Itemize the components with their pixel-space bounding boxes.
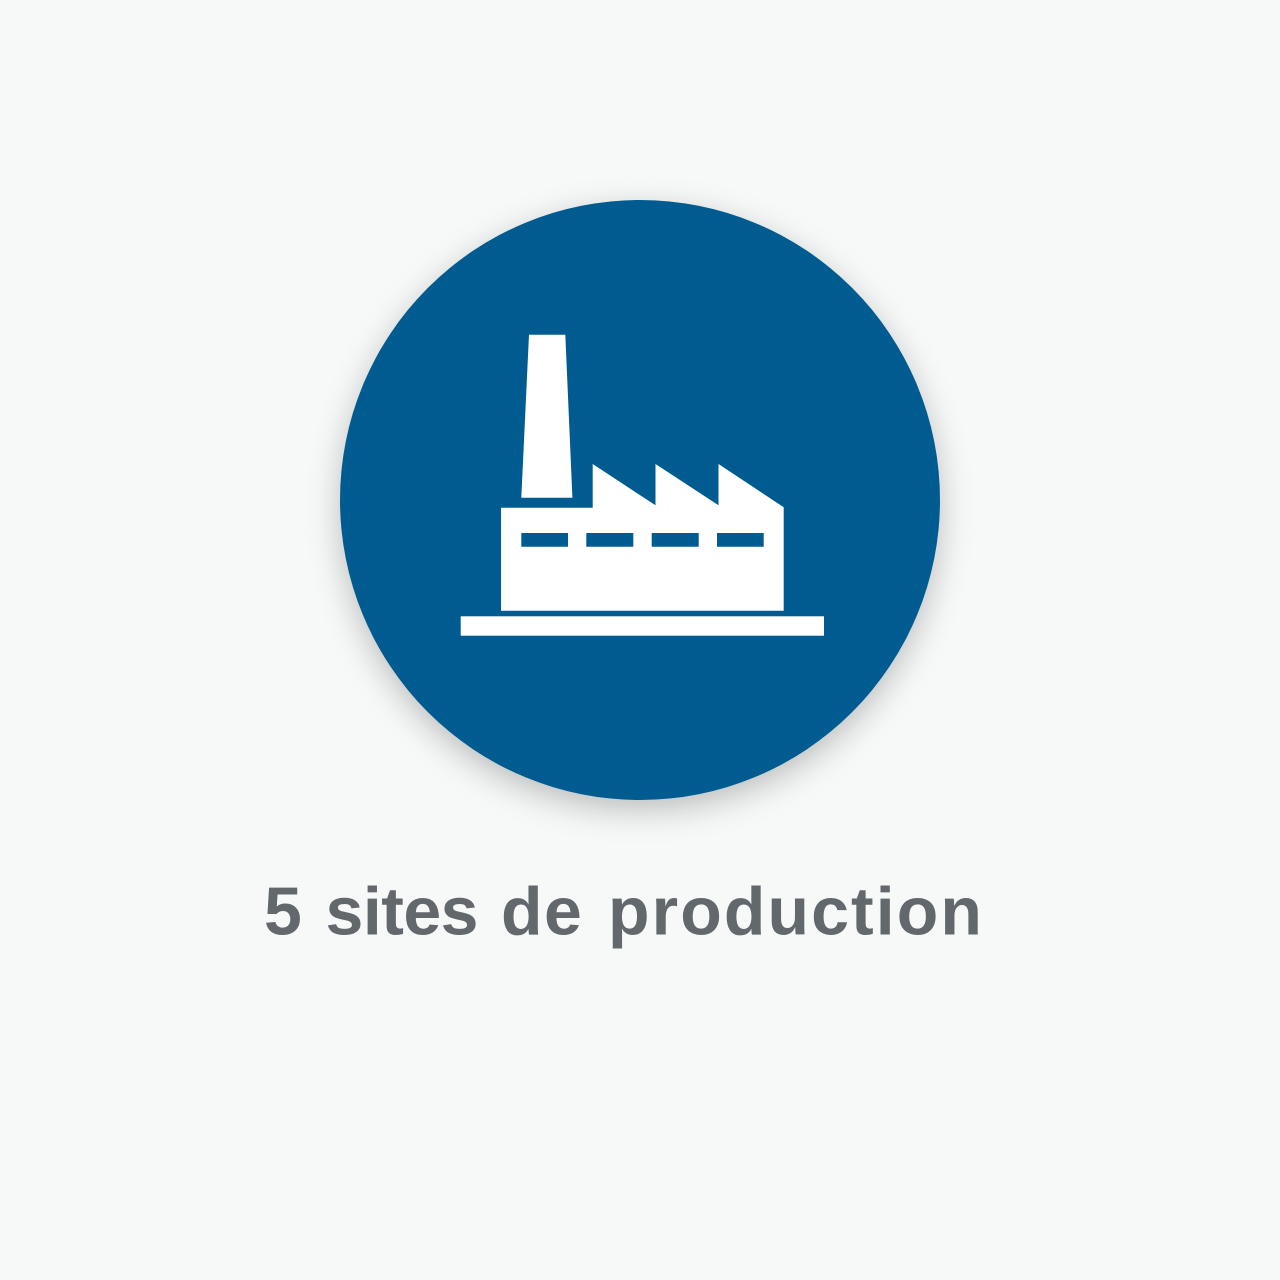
blue circle badge [340,200,940,800]
icon: factory [461,335,824,636]
caption: de [501,874,583,950]
caption: 5 [264,874,302,950]
circle shadow [340,210,940,810]
caption: sites [326,874,478,950]
factory ground base [461,616,824,636]
factory building with sawtooth roof and windows [501,464,784,611]
factory chimney [521,335,572,498]
caption: production [608,874,984,950]
